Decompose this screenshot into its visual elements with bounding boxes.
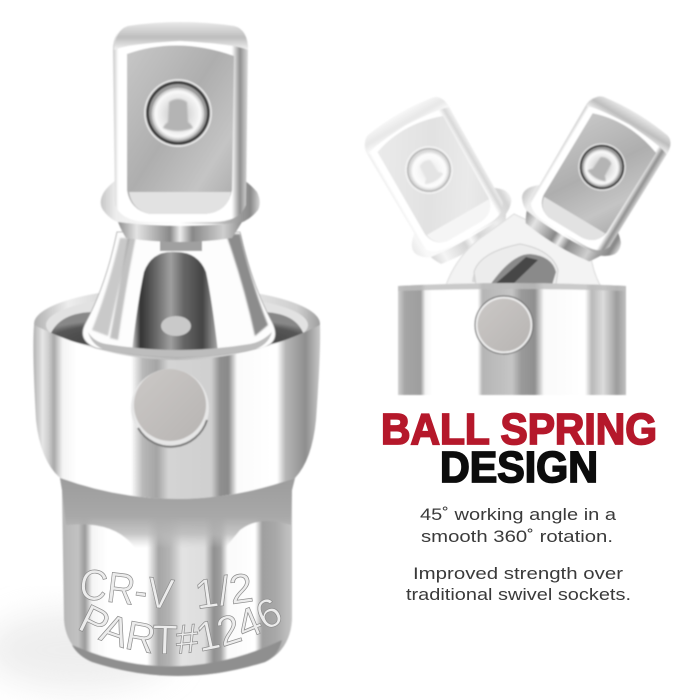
line: improved strength: Improved strength over bbox=[413, 564, 623, 583]
line: traditional swivel sockets: traditional swivel sockets. bbox=[406, 585, 631, 604]
upper socket body bbox=[33, 325, 320, 499]
ghost square drive at left position bbox=[350, 86, 524, 275]
top edge of socket bbox=[398, 283, 626, 291]
engraved marking: 1/2: 1/2 bbox=[192, 564, 256, 618]
square drive head with ball detent bbox=[101, 22, 260, 242]
line: working angle: 45˚ working angle in a bbox=[420, 505, 617, 524]
solid square drive at right position bbox=[509, 85, 684, 274]
heading: design: DESIGN bbox=[440, 443, 598, 492]
heading: ball spring: BALL SPRING bbox=[381, 405, 657, 454]
line: rotation: smooth 360˚ rotation. bbox=[421, 527, 613, 546]
engraved marking: part number: PART#1246 bbox=[78, 598, 281, 654]
lower socket body bbox=[60, 478, 295, 676]
shoulder band bbox=[60, 478, 295, 548]
retaining rivet bbox=[131, 369, 209, 447]
socket rim and interior bbox=[34, 287, 320, 361]
engraved marking: CR-V: CR-V bbox=[77, 560, 176, 619]
rotation illustration bbox=[350, 85, 684, 395]
cone reflections bbox=[92, 234, 268, 340]
curve for part number bbox=[76, 618, 290, 654]
body text bbox=[406, 505, 631, 604]
socket drop shadow bbox=[0, 610, 175, 690]
swivel cone with slot bbox=[83, 232, 275, 357]
socket body cutaway bbox=[398, 283, 626, 395]
swivel body between positions bbox=[446, 214, 600, 285]
rivet bbox=[475, 296, 533, 354]
main universal socket product image bbox=[33, 22, 320, 676]
base edge bbox=[72, 640, 282, 676]
